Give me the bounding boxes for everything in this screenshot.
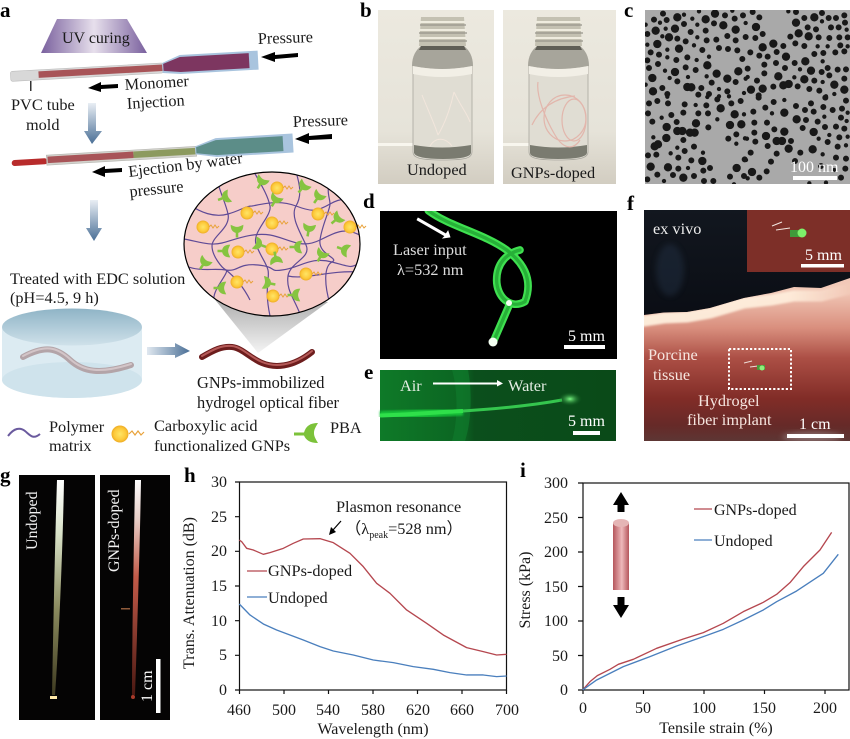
y tick labels bbox=[544, 475, 568, 699]
panel h: attenuation chart bbox=[181, 463, 519, 738]
arrow: ejection bbox=[92, 166, 122, 177]
legend: PBA bbox=[294, 418, 362, 443]
label g: g bbox=[0, 463, 11, 487]
text: 1 cm: 1 cm bbox=[139, 670, 156, 702]
x tick labels: 580 bbox=[361, 702, 385, 719]
legend: polymer matrix: Polymer bbox=[49, 417, 105, 436]
photo: undoped vial bbox=[378, 10, 494, 184]
text: porcine tissue: Porcine bbox=[648, 345, 698, 364]
text: PVC tube mold: PVC tube bbox=[11, 95, 75, 114]
photo: undoped fiber bbox=[19, 475, 95, 720]
y tick labels: 150 bbox=[544, 579, 568, 596]
panel e: air to water guiding bbox=[364, 360, 616, 441]
label h: h bbox=[184, 463, 196, 487]
text: fiber label: hydrogel optical fiber bbox=[197, 393, 340, 412]
text: hydrogel fiber implant: Hydrogel bbox=[698, 391, 760, 410]
x tick labels: 0 bbox=[579, 700, 587, 717]
text: ejection by water pressure bbox=[127, 148, 244, 201]
bottom light patches bbox=[782, 432, 842, 442]
text: hydrogel fiber implant bbox=[687, 391, 772, 429]
panel f: ex vivo tissue implant bbox=[627, 191, 850, 442]
annotation plasmon resonance: （λ bbox=[345, 519, 369, 538]
text: undoped: Undoped bbox=[407, 160, 467, 179]
photo background bbox=[380, 370, 616, 441]
legend: PBA: PBA bbox=[330, 418, 362, 437]
scale bar f bbox=[787, 434, 844, 438]
quadrant bottom-left particles bbox=[647, 97, 745, 184]
legend: polymer matrix: matrix bbox=[49, 436, 92, 455]
legend: carboxylic acid GNPs bbox=[112, 416, 290, 455]
panel g: fiber light leakage photos bbox=[0, 463, 170, 720]
axes and ticks bbox=[578, 483, 849, 694]
tissue bbox=[644, 278, 850, 441]
icon: UV curing lamp: UV curing bbox=[62, 30, 130, 47]
photo: GNPs-doped vial bbox=[503, 10, 616, 184]
panel a: fabrication schematic bbox=[0, 0, 366, 455]
fiber end highlight bbox=[488, 300, 512, 346]
text: GNPs-doped: GNPs-doped bbox=[511, 163, 595, 182]
annotation plasmon resonance bbox=[329, 497, 463, 541]
dotted selection box bbox=[729, 349, 791, 389]
y tick labels: 200 bbox=[544, 544, 568, 561]
arrow up bbox=[613, 492, 629, 512]
arrow: laser input bbox=[417, 218, 450, 238]
text: hydrogel fiber implant: fiber implant bbox=[687, 410, 772, 429]
text: ex vivo: ex vivo bbox=[653, 219, 701, 238]
panel i: stress strain chart bbox=[517, 458, 849, 737]
arrow: pressure 1 bbox=[261, 52, 298, 62]
text: porcine tissue: tissue bbox=[653, 365, 690, 384]
x axis title: Tensile strain (%) bbox=[659, 720, 773, 737]
implanted fiber bbox=[744, 361, 765, 370]
text: PVC tube mold: mold bbox=[26, 115, 59, 134]
PBA molecules bbox=[195, 174, 351, 301]
scale label e: 5 mm bbox=[568, 413, 605, 430]
icon: UV curing lamp bbox=[41, 19, 147, 53]
text: monomer injection bbox=[124, 71, 191, 113]
arrow: process down 2 bbox=[86, 200, 102, 241]
text: laser input: λ=532 nm bbox=[397, 260, 464, 279]
polymer network lines bbox=[184, 172, 362, 316]
arrow: process down 1 bbox=[84, 103, 102, 144]
black photo background bbox=[380, 211, 617, 359]
x tick labels: 150 bbox=[752, 700, 776, 717]
legend: carboxylic acid GNPs: Carboxylic acid bbox=[154, 416, 258, 435]
cream fat band bbox=[630, 286, 850, 323]
arrow: to fiber bbox=[147, 343, 190, 358]
y tick labels: 300 bbox=[544, 475, 568, 492]
legend GNPs-doped: GNPs-doped bbox=[268, 561, 352, 580]
leader line: tube mold bbox=[30, 81, 32, 91]
text: water: Water bbox=[508, 376, 547, 395]
guided green light bbox=[380, 400, 562, 416]
annotation plasmon resonance: =528 nm） bbox=[388, 519, 463, 538]
text: ejection by water pressure: Ejection by water bbox=[127, 148, 244, 181]
output glow bbox=[558, 392, 582, 406]
GNPs-immobilized fiber bbox=[202, 346, 312, 366]
x tick labels: 500 bbox=[272, 702, 296, 719]
label i: i bbox=[520, 458, 526, 482]
quadrant bottom-right particles bbox=[746, 98, 848, 183]
scale bar inset bbox=[801, 264, 844, 268]
x tick labels bbox=[579, 700, 837, 717]
gold nanoparticles bbox=[196, 182, 366, 302]
red curve GNPs-doped bbox=[583, 532, 832, 690]
magnification cone bbox=[212, 296, 328, 353]
y axis title: Stress (kPa) bbox=[517, 552, 534, 628]
TEM image of gold nanoparticles bbox=[645, 10, 850, 184]
text: laser input: Laser input bbox=[393, 240, 467, 259]
blue curve undoped bbox=[583, 554, 838, 690]
hydrogel network magnified circle bbox=[184, 172, 366, 316]
arrow: pressure 2 bbox=[295, 133, 332, 144]
annotation plasmon resonance: peak bbox=[369, 530, 388, 541]
text: porcine tissue bbox=[648, 345, 698, 384]
scale bar e bbox=[573, 431, 600, 435]
text: EDC treatment bbox=[10, 269, 185, 307]
inset photo bbox=[747, 210, 850, 272]
arrow: monomer injection bbox=[88, 82, 118, 92]
arrow down bbox=[613, 597, 629, 618]
y tick labels bbox=[211, 474, 227, 699]
quadrant top-left particles bbox=[646, 11, 746, 96]
x tick labels: 660 bbox=[450, 702, 474, 719]
x tick labels: 460 bbox=[227, 702, 251, 719]
axes and ticks bbox=[235, 482, 506, 694]
y tick labels: 50 bbox=[552, 648, 568, 665]
text: undoped rotated: Undoped bbox=[24, 491, 41, 550]
water meniscus bbox=[452, 370, 471, 441]
text: fiber label: GNPs-immobilized bbox=[197, 373, 324, 392]
scale bar c bbox=[793, 176, 837, 180]
x tick labels: 50 bbox=[635, 700, 651, 717]
x tick labels: 700 bbox=[495, 702, 519, 719]
x tick labels: 200 bbox=[813, 700, 837, 717]
scale bar label 100 nm: 100 nm bbox=[790, 159, 839, 176]
tube 1 monomer injection bbox=[10, 51, 259, 83]
y tick labels: 100 bbox=[544, 613, 568, 630]
scale label d: 5 mm bbox=[568, 328, 605, 345]
text: air: Air bbox=[400, 376, 422, 395]
quadrant top-right particles bbox=[748, 11, 848, 96]
y tick labels: 10 bbox=[211, 613, 227, 630]
y tick labels: 25 bbox=[211, 509, 227, 526]
scale bar g bbox=[156, 659, 160, 713]
text: GNPs-doped rotated: GNPs-doped bbox=[106, 489, 123, 572]
legend: polymer matrix bbox=[8, 417, 105, 455]
y tick labels: 30 bbox=[211, 474, 227, 491]
scale bar d bbox=[564, 345, 605, 349]
text: monomer injection: Injection bbox=[126, 90, 185, 113]
arrow: air to water bbox=[433, 380, 503, 386]
text: EDC treatment: (pH=4.5, 9 h) bbox=[10, 288, 99, 307]
dark background bbox=[644, 210, 850, 320]
tube 2 water ejection bbox=[11, 134, 294, 169]
label f: f bbox=[627, 191, 635, 215]
x axis title: Wavelength (nm) bbox=[317, 721, 429, 738]
text: laser input bbox=[393, 240, 467, 279]
x tick labels: 540 bbox=[316, 702, 340, 719]
panel c: TEM micrograph bbox=[624, 0, 850, 184]
text: EDC treatment: Treated with EDC solution bbox=[10, 269, 185, 288]
y tick labels: 250 bbox=[544, 510, 568, 527]
y tick labels: 15 bbox=[211, 578, 227, 595]
text: monomer injection: Monomer bbox=[124, 71, 190, 94]
panel b: vial photographs bbox=[360, 0, 616, 184]
text: PVC tube mold bbox=[11, 95, 75, 134]
text: pressure 1: Pressure bbox=[257, 27, 313, 48]
x tick labels: 100 bbox=[692, 700, 716, 717]
icon: EDC solution dish bbox=[2, 308, 142, 398]
red curve GNPs-doped bbox=[239, 539, 507, 655]
knotted green fiber bbox=[428, 211, 528, 342]
annotation plasmon resonance: Plasmon resonance bbox=[336, 497, 461, 516]
legend undoped: Undoped bbox=[714, 533, 773, 550]
x tick labels bbox=[227, 702, 519, 719]
panel d: knotted fiber under laser bbox=[363, 189, 617, 359]
blue curve undoped bbox=[239, 604, 507, 677]
legend GNPs-doped: GNPs-doped bbox=[714, 502, 797, 519]
scale label inset: 5 mm bbox=[805, 247, 842, 264]
y tick labels: 0 bbox=[219, 682, 227, 699]
text: pressure 2: Pressure bbox=[292, 110, 348, 131]
text: fiber label bbox=[197, 373, 340, 412]
icon: stretched cylinder bbox=[613, 492, 629, 618]
text: ejection by water pressure: pressure bbox=[128, 176, 184, 201]
label d: d bbox=[363, 189, 375, 213]
label e: e bbox=[364, 360, 373, 384]
y tick labels: 5 bbox=[219, 647, 227, 664]
x tick labels: 620 bbox=[406, 702, 430, 719]
y tick labels: 20 bbox=[211, 543, 227, 560]
legend undoped: Undoped bbox=[268, 588, 328, 607]
photo: GNPs-doped fiber bbox=[100, 475, 170, 720]
y tick labels: 0 bbox=[560, 682, 568, 699]
legend: carboxylic acid GNPs: functionalized GNPs bbox=[154, 436, 290, 455]
scale label f: 1 cm bbox=[799, 416, 831, 433]
y axis title: Trans. Attenuation (dB) bbox=[181, 517, 198, 669]
